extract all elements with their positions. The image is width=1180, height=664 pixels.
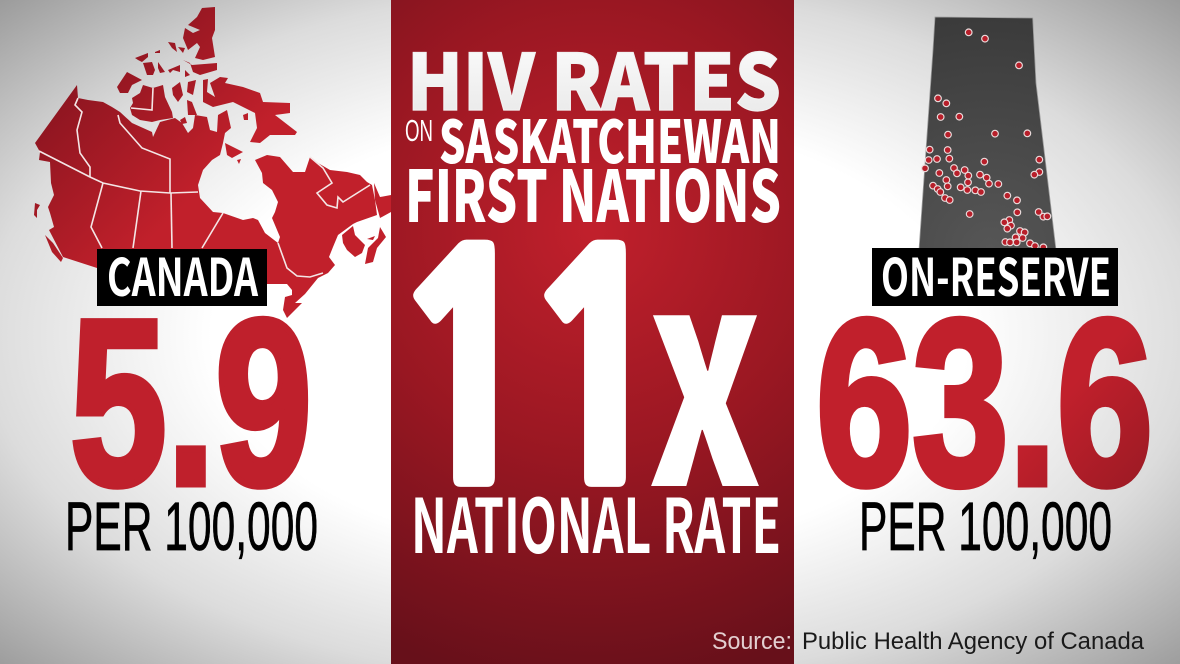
heading: Saskatchewan: SASKATCHEWAN	[439, 95, 781, 180]
label: Canada: CANADA	[107, 236, 258, 311]
value: 5.9: 5.9	[70, 271, 312, 535]
panel: centre headline	[388, 0, 794, 664]
multiplier: 11x: 1	[518, 217, 680, 528]
map: Canada	[34, 7, 391, 318]
heading: HIV RATES: HIV RATES	[407, 22, 781, 133]
multiplier: 11x	[388, 139, 762, 573]
multiplier: 11x: 1	[388, 217, 550, 528]
multiplier: 11x: x	[648, 139, 762, 573]
source line: Source:	[712, 628, 792, 655]
subheading: national rate: NATIONAL RATE	[411, 466, 781, 575]
map: Saskatchewan with community dots	[919, 17, 1056, 251]
heading: First Nations: FIRST NATIONS	[405, 141, 781, 243]
unit: per 100,000 (Canada): PER 100,000	[65, 488, 318, 565]
heading: on: ON	[405, 113, 433, 148]
source line: Public Health Agency of Canada	[802, 628, 1145, 655]
